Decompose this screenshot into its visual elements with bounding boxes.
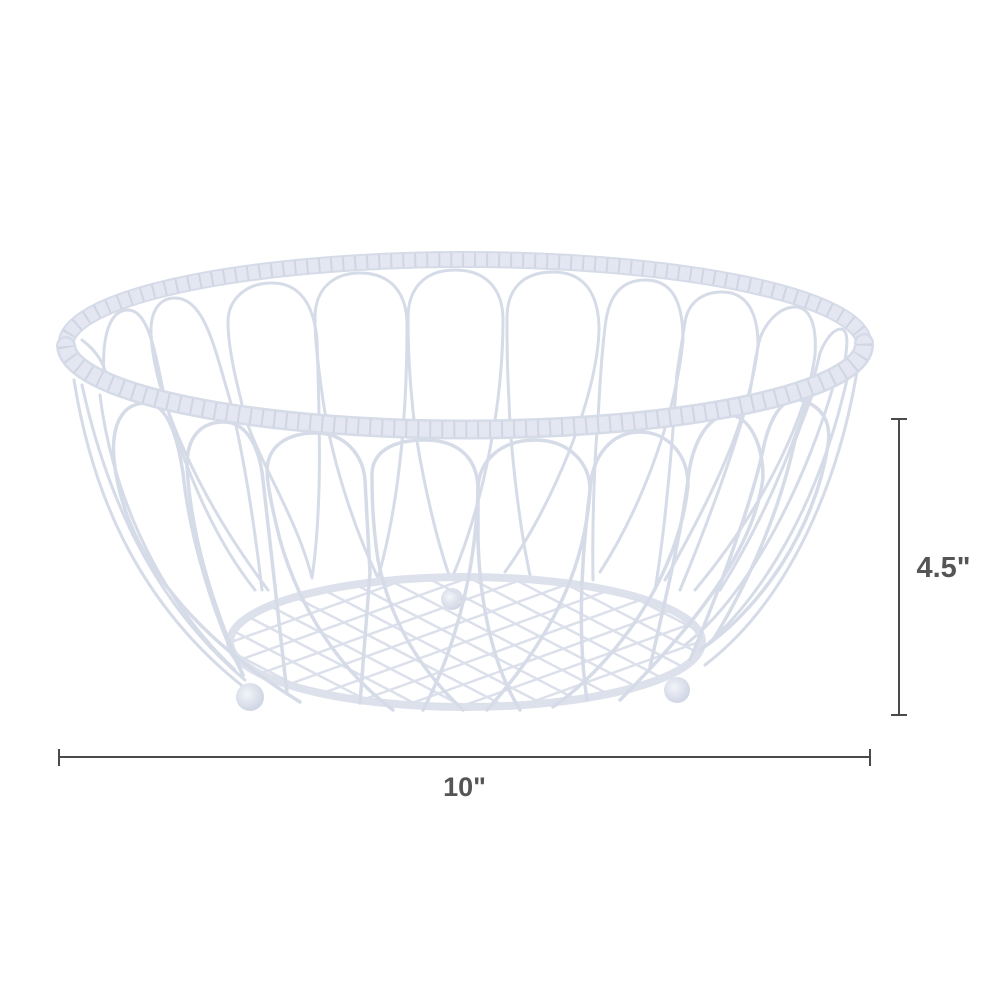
front wire petals	[114, 395, 829, 710]
width label: 10"	[443, 772, 486, 802]
back rear foot	[441, 588, 463, 610]
back wire petals	[82, 270, 847, 590]
base ring	[230, 577, 702, 707]
back rim of basket	[66, 260, 864, 346]
outer side wires	[74, 365, 858, 692]
height label: 4.5"	[916, 552, 971, 584]
height dimension line	[891, 419, 907, 715]
width dimension line	[59, 749, 870, 766]
product: white wire basket	[56, 251, 874, 712]
front feet	[236, 677, 690, 711]
base wire mesh	[234, 581, 696, 703]
front rim of basket	[66, 343, 864, 429]
